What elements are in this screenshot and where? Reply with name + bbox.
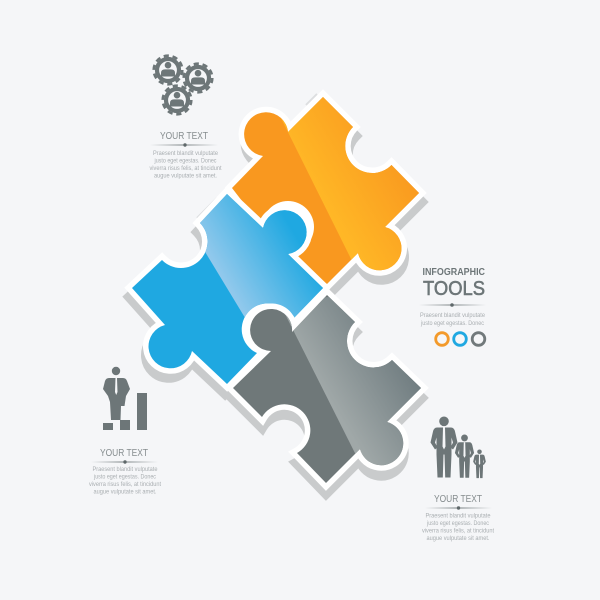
heading: infographic tools: INFOGRAPHIC [422, 266, 485, 278]
text block: top left: viverra risus felis, at tincidunt [150, 165, 222, 172]
text block: bottom left: YOUR TEXT [100, 448, 148, 459]
panel: orange puzzle piece [227, 90, 426, 290]
text block: bottom left [89, 448, 161, 496]
text block: bottom right: augue vulputate sit amet. [426, 535, 490, 542]
panel: blue puzzle piece [132, 180, 340, 384]
legend: three rings [436, 333, 485, 345]
icon: three businessmen descending in size [430, 416, 486, 478]
text block: bottom left: viverra risus felis, at tincidunt [89, 481, 161, 488]
icon: three gears with people [154, 56, 212, 114]
text block: bottom right [422, 494, 494, 542]
text block: bottom right: Praesent blandit vulputate [426, 512, 491, 520]
heading: infographic tools [419, 266, 486, 327]
text block: bottom left: justo eget egestas. Donec [93, 474, 157, 480]
icon: businessman on rising bars [103, 367, 147, 430]
text block: top left: justo eget egestas. Donec [154, 158, 217, 164]
text block: bottom right: viverra risus felis, at tincidunt [422, 528, 494, 534]
text block: bottom right: justo eget egestas. Donec [426, 520, 490, 527]
heading: infographic tools: justo eget egestas. Donec [420, 320, 485, 327]
text block: top left: augue vulputate sit amet. [154, 172, 217, 180]
panel: gray puzzle piece [233, 290, 450, 490]
text block: top left: Praesent blandit vulputate [153, 150, 218, 157]
heading: infographic tools: TOOLS [423, 278, 485, 300]
text block: top left: YOUR TEXT [160, 131, 208, 142]
text block: bottom right: YOUR TEXT [434, 494, 482, 505]
text block: bottom left: augue vulputate sit amet. [94, 488, 157, 496]
heading: infographic tools: Praesent blandit vulputate [420, 312, 485, 319]
panel: puzzle shadows [130, 94, 421, 493]
text block: top left [150, 131, 222, 180]
text block: bottom left: Praesent blandit vulputate [92, 466, 158, 473]
